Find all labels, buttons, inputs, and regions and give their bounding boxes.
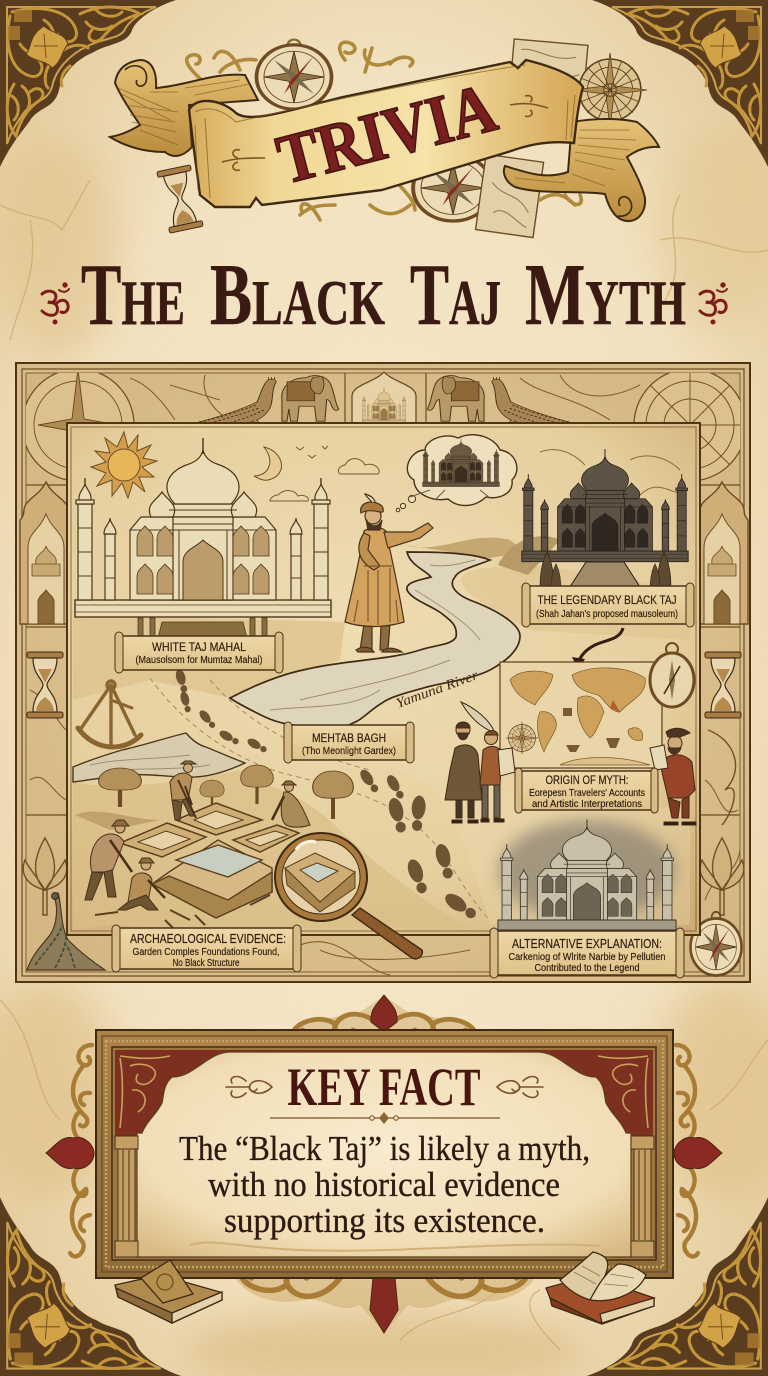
key fact text: supporting its existence. bbox=[224, 1201, 545, 1240]
label scroll: alternative explanation bbox=[490, 928, 684, 978]
ribbon left tail bbox=[110, 60, 258, 156]
label scroll: alternative explanation: Carkeniog of Wlrite Narbie by Pellutien bbox=[508, 951, 666, 963]
icon: magnifying glass bbox=[275, 833, 422, 959]
heading: The Black Taj Myth bbox=[81, 247, 686, 344]
excavated block bbox=[152, 840, 272, 918]
trench: right square bbox=[233, 825, 299, 852]
flourish left bbox=[226, 1077, 272, 1097]
frieze: peacocks bbox=[195, 377, 573, 423]
label scroll: legendary black Taj: (Shah Jahan's proposed mausoleum) bbox=[536, 608, 678, 620]
corner ornament: top right bbox=[592, 0, 768, 167]
frieze: elephants bbox=[282, 376, 484, 421]
icon: sun bbox=[91, 432, 157, 498]
arrow: legend to origin bbox=[572, 628, 623, 670]
label scroll: alternative explanation: Contributed to the Legend bbox=[534, 962, 640, 974]
heading: The Black Taj Myth: MYTH bbox=[525, 247, 686, 344]
label scroll: archaeological evidence bbox=[112, 925, 301, 972]
worker crouching bbox=[118, 858, 165, 910]
icon: crescent moon bbox=[254, 447, 281, 480]
trivia banner bbox=[110, 39, 659, 238]
side ornament left bbox=[46, 1045, 94, 1256]
heading: key fact: KEY FACT bbox=[288, 1057, 480, 1117]
figure: red coated traveller bbox=[650, 728, 696, 825]
icon: hourglass bbox=[157, 165, 203, 233]
key fact text: The “Black Taj” is likely a myth, bbox=[179, 1129, 590, 1168]
illustration: river Yamuna bbox=[73, 552, 520, 782]
cream panel bbox=[137, 1052, 631, 1257]
label scroll: Mehtab Bagh: (Tho Meonlight Gardex) bbox=[302, 745, 396, 757]
label scroll: origin of myth: and Artistic Interpretations bbox=[532, 798, 642, 810]
inner scene panel bbox=[67, 423, 700, 935]
frame bbox=[96, 1030, 673, 1278]
figures: European travellers bbox=[445, 702, 515, 823]
panel frame bbox=[16, 363, 750, 982]
label scroll: archaeological evidence: No Black Structure bbox=[172, 957, 240, 969]
distant hills bbox=[405, 538, 525, 558]
ribbon main bbox=[189, 60, 583, 207]
flourish right bbox=[497, 1077, 543, 1097]
thought bubble bbox=[396, 435, 517, 512]
icon: pocket compass bbox=[650, 643, 694, 707]
birds and clouds bbox=[270, 446, 379, 501]
label scroll: Mehtab Bagh bbox=[284, 722, 414, 763]
ribbon right tail bbox=[504, 119, 659, 221]
label: Yamuna River: Yamuna River bbox=[394, 668, 481, 712]
icon: om left bbox=[42, 284, 69, 323]
title: trivia: TRIVIA bbox=[270, 69, 504, 199]
bottom crest bbox=[235, 1272, 535, 1333]
illustration: excavation site bbox=[75, 761, 353, 930]
trench: left square bbox=[120, 823, 206, 857]
side botanical motifs bbox=[23, 730, 744, 915]
label scroll: Mehtab Bagh: MEHTAB BAGH bbox=[312, 731, 386, 745]
label scroll: archaeological evidence: ARCHAEOLOGICAL EVIDENCE: bbox=[130, 932, 286, 946]
icon: lower map bbox=[476, 154, 544, 238]
illustration: white Taj Mahal bbox=[75, 438, 331, 650]
illustration: polluted Taj bbox=[498, 820, 676, 931]
small ships bbox=[563, 708, 620, 752]
label scroll: legendary black Taj: THE LEGENDARY BLACK TAJ bbox=[538, 593, 676, 607]
icon: compass behind banner bbox=[256, 40, 332, 109]
label scroll: legendary black Taj bbox=[522, 583, 694, 627]
worker bending bbox=[85, 820, 132, 900]
label scroll: white Taj Mahal bbox=[115, 632, 283, 673]
illustration: path with footprints bbox=[150, 668, 490, 922]
key fact text bbox=[179, 1129, 590, 1240]
frieze: right zodiac wheel bbox=[634, 369, 746, 481]
icon: om right bbox=[700, 284, 727, 323]
lower river bbox=[73, 733, 245, 782]
side hourglasses bbox=[27, 652, 741, 718]
label scroll: archaeological evidence: Garden Comples Foundations Found, bbox=[132, 946, 280, 958]
small compass rose bbox=[506, 722, 538, 754]
gold flourishes bbox=[187, 42, 581, 220]
compass bottom right bbox=[690, 912, 742, 976]
icon: open book bbox=[546, 1252, 654, 1324]
icon: map behind banner bbox=[510, 39, 588, 95]
label scroll: white Taj Mahal: (Mausolsom for Mumtaz Mahal) bbox=[136, 654, 262, 666]
icon: lower compass bbox=[413, 155, 493, 221]
heading: The Black Taj Myth: THE bbox=[81, 247, 185, 344]
key fact text: with no historical evidence bbox=[208, 1165, 560, 1204]
heading: The Black Taj Myth: TAJ bbox=[410, 247, 501, 344]
peacock bottom left bbox=[27, 893, 105, 970]
heading: The Black Taj Myth: BLACK bbox=[210, 247, 385, 344]
illustration: legendary black Taj bbox=[498, 449, 688, 602]
corner ornament: top left bbox=[0, 0, 176, 167]
side arches bbox=[20, 482, 748, 624]
panel: key fact bbox=[46, 995, 722, 1333]
worker kneeling bbox=[272, 781, 310, 827]
trench: upper square bbox=[176, 803, 262, 835]
ground tones bbox=[73, 617, 345, 700]
label scroll: white Taj Mahal: WHITE TAJ MAHAL bbox=[152, 640, 246, 654]
frieze: map lines bbox=[30, 375, 740, 975]
label scroll: alternative explanation: ALTERNATIVE EXPLANATION: bbox=[512, 937, 662, 951]
label scroll: origin of myth: ORIGIN OF MYTH: bbox=[546, 773, 628, 787]
icon: wind rose bbox=[573, 53, 647, 127]
frieze dividers bbox=[26, 373, 740, 815]
world map panel bbox=[500, 662, 662, 768]
divider bbox=[270, 1112, 500, 1124]
corner ornament: bottom left bbox=[0, 1197, 181, 1376]
top crest bbox=[290, 995, 478, 1035]
red spandrels bbox=[115, 1050, 653, 1140]
pillars bbox=[115, 1136, 654, 1257]
panel: map illustration bbox=[16, 363, 750, 982]
side ornament right bbox=[674, 1045, 722, 1256]
frieze: centre arch bbox=[352, 372, 416, 423]
icon: sextant bbox=[78, 681, 141, 747]
illustration: Shah Jahan thinking bbox=[345, 494, 433, 652]
icon: closed books bbox=[115, 1260, 222, 1323]
frieze: left compass rose bbox=[22, 369, 134, 483]
label scroll: origin of myth bbox=[515, 768, 658, 813]
worker standing with spade bbox=[170, 761, 196, 820]
corner ornament: bottom right bbox=[587, 1197, 768, 1376]
label scroll: origin of myth: Eorepesn Travelers' Accounts bbox=[529, 787, 645, 799]
